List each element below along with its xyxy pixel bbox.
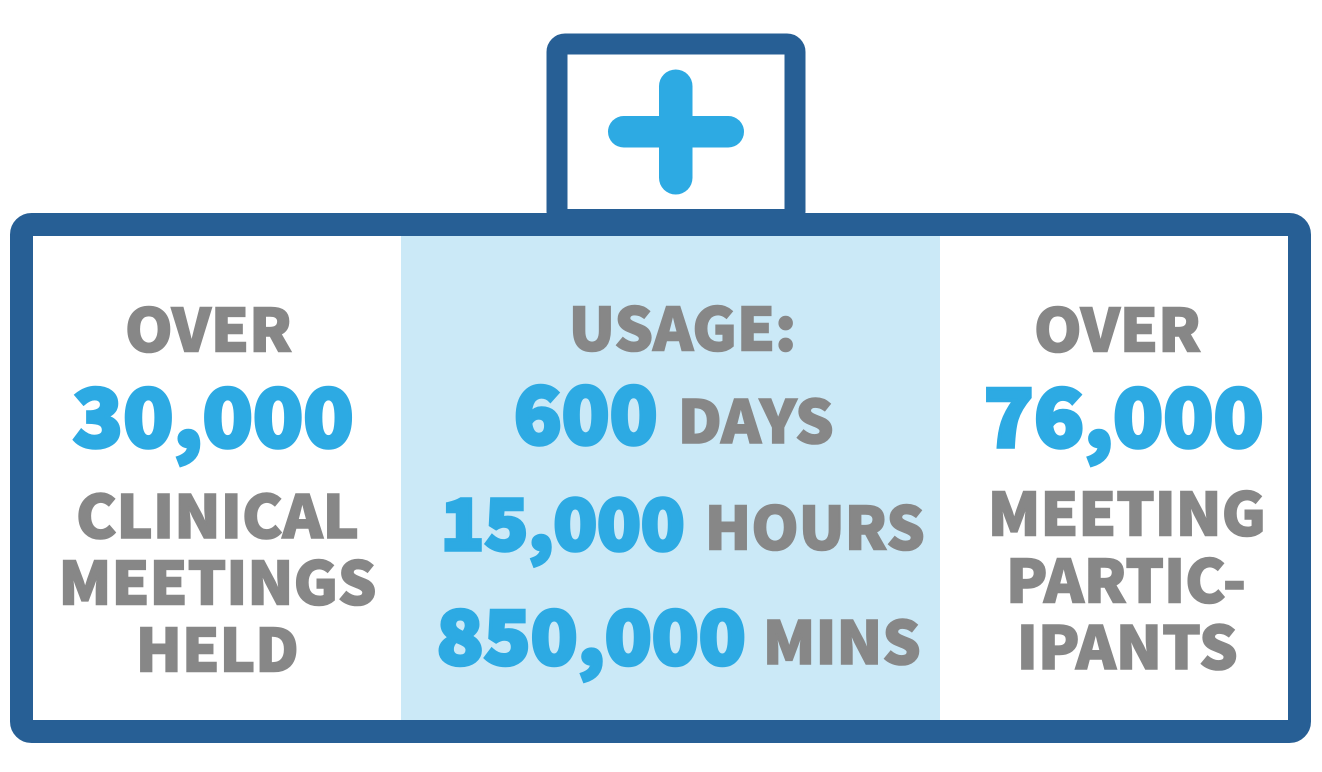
text block: usage: DAYS <box>678 375 834 461</box>
panel: building outline <box>22 224 1300 732</box>
text block: usage: MINS <box>763 596 921 682</box>
text block: meeting participants: IPANTS <box>1017 601 1238 687</box>
text block: usage: 15,000 <box>441 469 685 571</box>
text block: usage: 850,000 <box>437 579 746 686</box>
text block: clinical meetings <box>58 284 376 690</box>
text block: usage: HOURS <box>705 482 925 568</box>
text block: usage <box>437 283 925 686</box>
panel: highlighted centre <box>401 236 940 721</box>
text block: clinical meetings: 30,000 <box>73 355 354 471</box>
text block: meeting participants: OVER <box>1034 284 1201 370</box>
text block: usage: USAGE: <box>569 283 796 369</box>
text block: clinical meetings: HELD <box>136 604 299 690</box>
text block: meeting participants: PARTIC- <box>1006 534 1246 620</box>
text block: clinical meetings: OVER <box>125 284 292 370</box>
text block: meeting participants <box>984 284 1266 687</box>
text block: meeting participants: 76,000 <box>984 355 1264 471</box>
text block: usage: 600 <box>514 352 658 467</box>
icon: hospital sign with cross <box>557 44 795 220</box>
text block: clinical meetings: MEETINGS <box>58 536 376 622</box>
text block: meeting participants: MEETING <box>988 468 1266 554</box>
text block: clinical meetings: CLINICAL <box>76 470 359 556</box>
